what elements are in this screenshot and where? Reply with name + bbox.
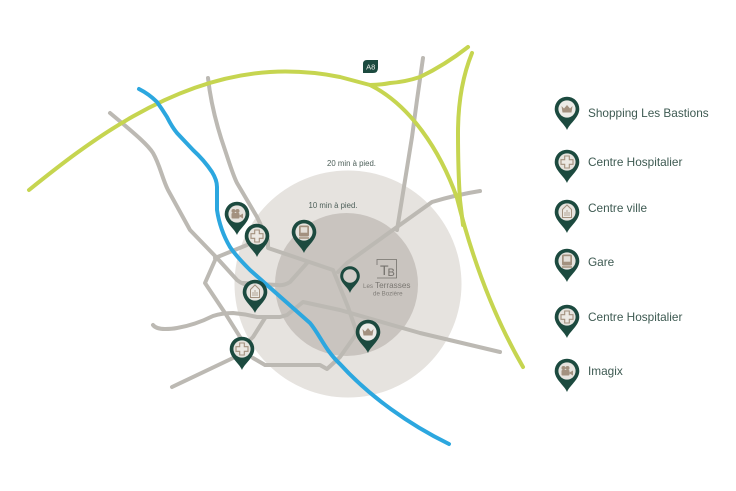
- map pin: Imagix: [225, 202, 249, 235]
- legend item: Gare: Gare: [588, 255, 615, 269]
- label: 20 min: 20 min à pied.: [327, 159, 376, 168]
- legend item: Centre Hospitalier 2: [555, 305, 682, 338]
- legend item: Centre Hospitalier 2: Centre Hospitalier: [588, 310, 682, 324]
- logo: Les Terrasses de Bozière: B: [388, 267, 395, 279]
- map pin: Centre Hospitalier: [245, 224, 269, 257]
- zone: 10 min walking radius: [275, 213, 418, 356]
- legend item: Gare: [555, 249, 615, 282]
- zone: 20 min walking radius: [234, 170, 462, 398]
- legend item: Centre ville: Centre ville: [588, 201, 647, 215]
- legend item: Imagix: [555, 359, 623, 392]
- legend item: Shopping Les Bastions: Shopping Les Bastions: [588, 106, 709, 120]
- motorway A8 and green roads: [29, 47, 523, 367]
- map pin: Gare: [292, 220, 316, 253]
- legend item: Centre ville: [555, 200, 647, 233]
- legend item: Imagix: Imagix: [588, 364, 623, 378]
- label: 10 min: 10 min à pied.: [309, 201, 357, 210]
- legend item: Centre Hospitalier: [555, 150, 682, 183]
- legend item: Centre Hospitalier: Centre Hospitalier: [588, 155, 682, 169]
- badge: A8: [363, 60, 378, 73]
- logo: Les Terrasses de Bozière: de Bozière: [373, 290, 403, 298]
- badge: A8: A8: [366, 62, 375, 72]
- map pin: Shopping Les Bastions: [356, 320, 380, 353]
- map pin: Centre ville: [243, 280, 267, 313]
- logo: Les Terrasses de Bozière: Terrasses: [375, 281, 410, 290]
- river: [139, 89, 449, 444]
- map pin: Les Terrasses de Bozière: [340, 266, 360, 293]
- legend: [555, 97, 709, 392]
- roads network: [110, 58, 500, 387]
- logo: Les Terrasses de Bozière: [363, 260, 410, 298]
- legend item: Shopping Les Bastions: [555, 97, 709, 130]
- logo: Les Terrasses de Bozière: Les: [363, 283, 373, 290]
- logo: Les Terrasses de Bozière: T: [380, 262, 389, 278]
- map pin: Centre Hospitalier south: [230, 337, 254, 370]
